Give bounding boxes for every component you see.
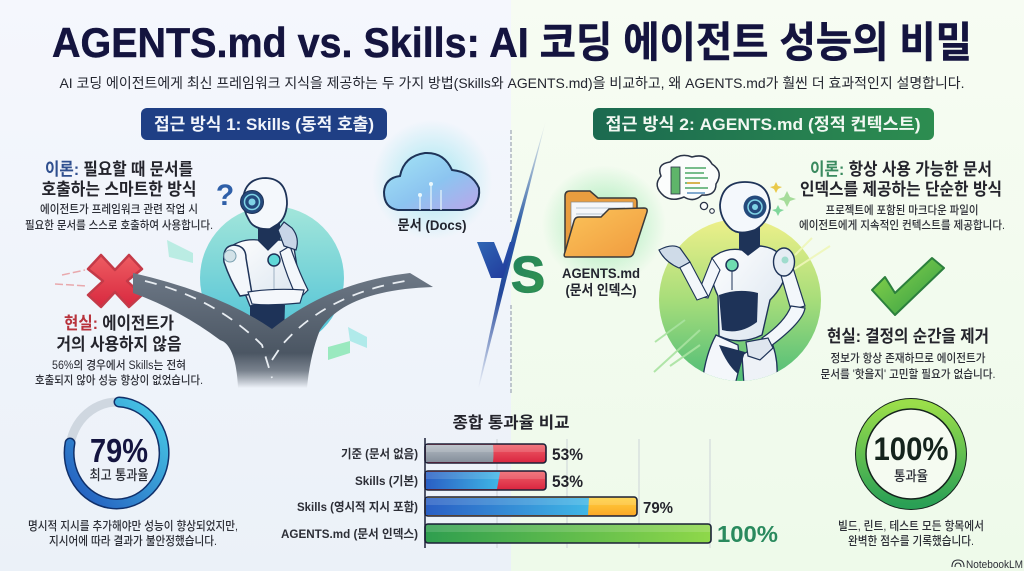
text block: AGENTS.md reality: 문서를 '핫을지' 고민할 필요가 없습니다. <box>820 367 996 381</box>
text block: Skills reality: 거의 사용하지 않음 <box>56 335 182 354</box>
center divider <box>478 120 546 395</box>
robot: thinking agent <box>224 178 308 335</box>
decorative parallelograms <box>167 240 367 360</box>
icon: red X <box>55 255 142 307</box>
label: docs: 문서 (Docs) <box>398 217 466 233</box>
text block: Skills theory <box>25 160 213 232</box>
robot on right: circle backdrop <box>659 219 821 381</box>
caption: 79%: 지시어에 따라 결과가 불안정했습니다. <box>49 533 217 548</box>
caption: 79% <box>28 519 238 548</box>
stat ring: 79% <box>69 402 164 504</box>
subtitle: AI 코딩 에이전트에게 최신 프레임워크 지식을 제공하는 두 가지 방법(Skills와 AGENTS.md)을 비교하고, 왜 AGENTS.md가 훨씬 더 효과적인지 설명합니다. <box>60 75 964 91</box>
heading pill: approach 1 <box>141 108 387 140</box>
icon: thought bubble with document index <box>657 155 719 213</box>
label: AGENTS.md folder: (문서 인덱스) <box>566 282 636 298</box>
chart title: 종합 통과율 비교 <box>452 414 570 432</box>
stat ring: 79%: 79% <box>90 432 148 469</box>
bar: AGENTS.md 100% <box>281 521 778 547</box>
text block: Skills theory: 필요한 문서를 스스로 호출하여 사용합니다. <box>25 218 213 232</box>
text block: Skills reality: 호출되지 않아 성능 향상이 없었습니다. <box>35 374 203 387</box>
road fork <box>133 273 433 388</box>
bar: Skills explicit 79% <box>297 497 673 517</box>
bar: Skills explicit 79%: 79% <box>643 500 673 517</box>
heading pill: approach 1: 접근 방식 1: Skills (동적 호출) <box>154 115 374 134</box>
chart: overall pass rate comparison <box>281 414 778 548</box>
stat ring: 100% <box>855 398 967 510</box>
robot: explaining agent <box>659 182 805 385</box>
text block: Skills reality <box>35 314 203 387</box>
caption: 100%: 완벽한 점수를 기록했습니다. <box>848 533 974 548</box>
text block: AGENTS.md theory <box>799 160 1005 232</box>
bar: AGENTS.md 100%: 100% <box>717 521 778 547</box>
caption: 100% <box>838 519 984 548</box>
icon: folder <box>542 165 666 285</box>
bar: baseline 53%: 기준 (문서 없음) <box>341 446 418 461</box>
VS mark <box>477 242 545 303</box>
bar: Skills default 53% <box>355 471 583 491</box>
text block: Skills theory: 이론: 필요할 때 문서를 <box>45 160 193 179</box>
text block: Skills reality: 56%의 경우에서 Skills는 전혀 <box>52 359 186 372</box>
text block: AGENTS.md reality: 현실: 결정의 순간을 제거 <box>827 327 989 346</box>
caption: 79%: 명시적 지시를 추가해야만 성능이 향상되었지만, <box>28 519 238 533</box>
stat ring: 100%: 100% <box>874 431 948 467</box>
bar: baseline 53%: 53% <box>552 446 583 464</box>
text block: AGENTS.md reality <box>820 327 996 381</box>
text block: AGENTS.md theory: 인덱스를 제공하는 단순한 방식 <box>800 180 1002 199</box>
text block: AGENTS.md theory: 프로젝트에 포함된 마크다운 파일이 <box>826 203 978 217</box>
icon: docs cloud <box>372 120 492 240</box>
text block: Skills reality: 현실: 에이전트가 <box>64 314 174 333</box>
bar: Skills default 53%: 53% <box>552 473 583 491</box>
label: AGENTS.md folder: AGENTS.md <box>562 265 640 281</box>
icon: green check <box>872 258 944 315</box>
icon: question mark: ? <box>216 179 234 212</box>
bar: Skills default 53%: Skills (기본) <box>355 473 418 488</box>
text block: AGENTS.md reality: 정보가 항상 존재하므로 에이전트가 <box>830 352 986 365</box>
text block: Skills theory: 호출하는 스마트한 방식 <box>42 180 196 199</box>
label: AGENTS.md folder <box>562 265 640 298</box>
text block: Skills theory: 에이전트가 프레임워크 관련 작업 시 <box>40 202 198 216</box>
stat ring: 100%: 통과율 <box>894 468 928 484</box>
bar: Skills explicit 79%: Skills (영시적 지시 포함) <box>297 499 418 514</box>
VS mark: S <box>511 246 545 303</box>
title: AGENTS.md vs. Skills: AI 코딩 에이전트 성능의 비밀 <box>52 19 972 66</box>
bar: baseline 53% <box>341 444 583 464</box>
robot on left: circle backdrop <box>200 206 344 350</box>
speed lines <box>654 238 830 372</box>
caption: 100%: 빌드, 린트, 테스트 모든 항목에서 <box>838 519 984 533</box>
heading pill: approach 2 <box>593 108 934 140</box>
heading pill: approach 2: 접근 방식 2: AGENTS.md (정적 컨텍스트) <box>606 115 920 134</box>
sparkles <box>770 182 796 216</box>
stat ring: 79%: 최고 통과율 <box>90 467 149 483</box>
text block: AGENTS.md theory: 에이전트에게 지속적인 컨텍스트를 제공합니다. <box>799 218 1005 232</box>
bar: AGENTS.md 100%: AGENTS.md (문서 인덱스) <box>281 527 418 541</box>
text block: AGENTS.md theory: 이론: 항상 사용 가능한 문서 <box>810 160 992 179</box>
